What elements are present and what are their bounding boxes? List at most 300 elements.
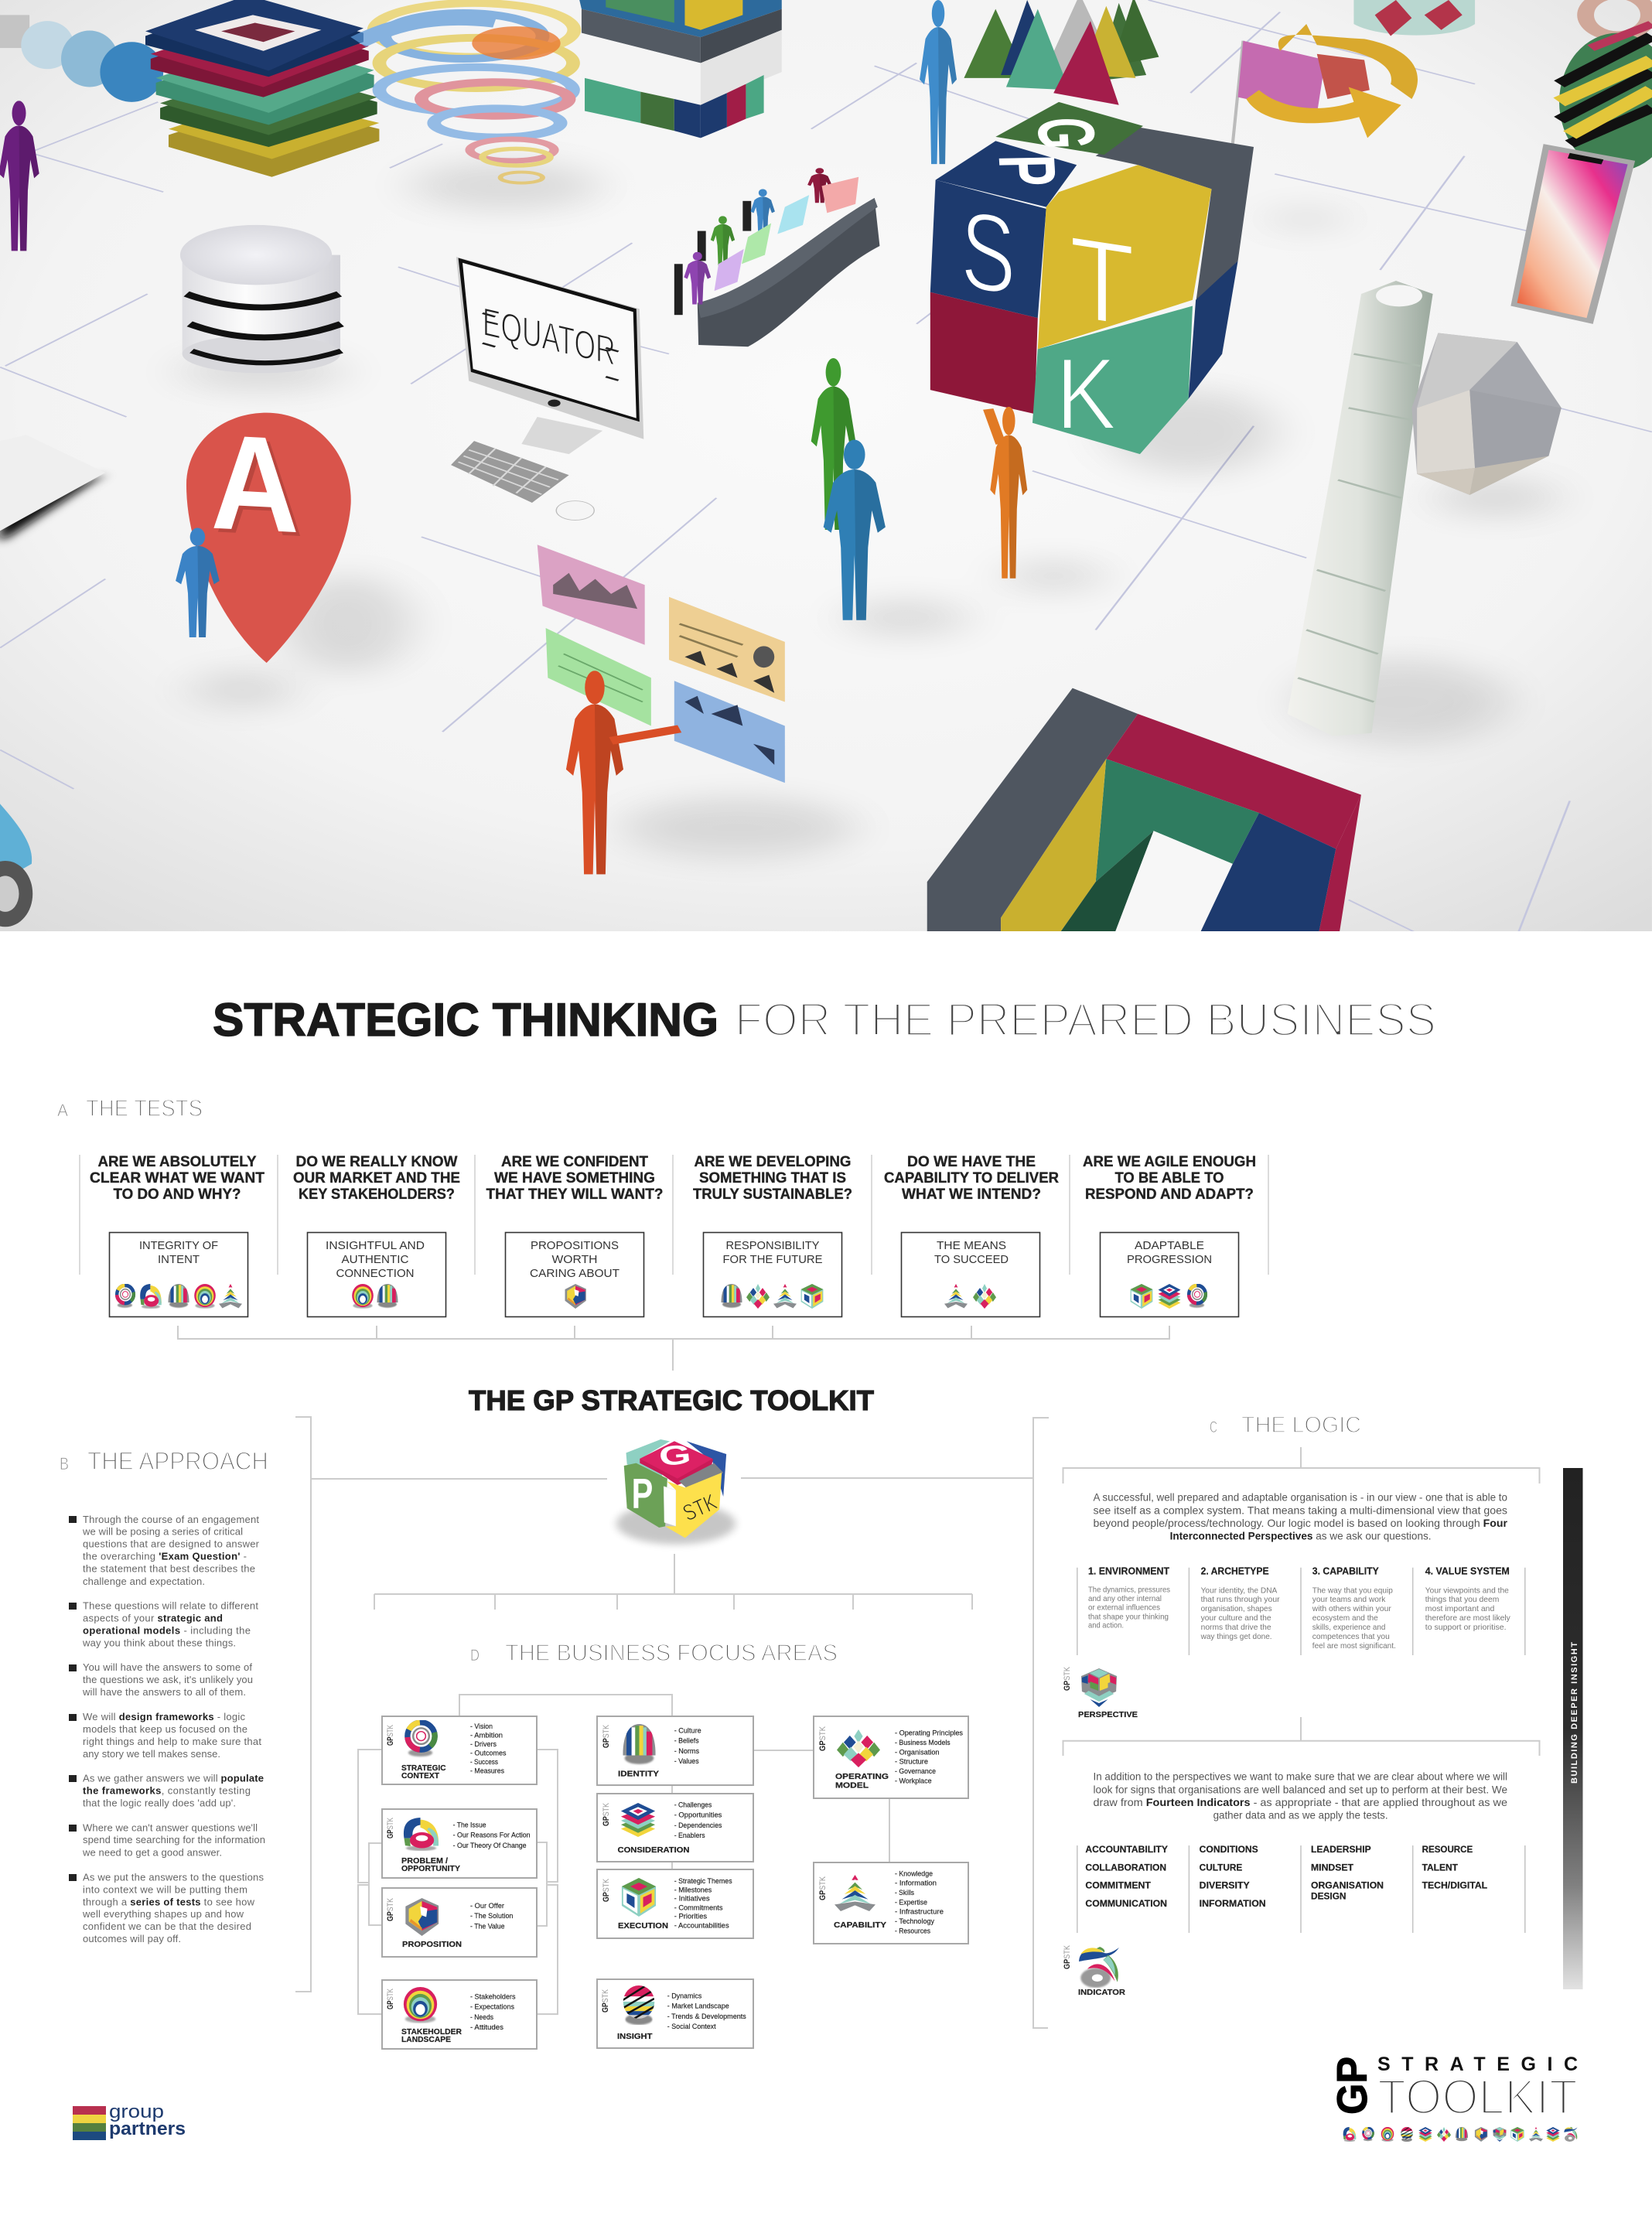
perspective 3: capability: competences that you <box>1312 1632 1390 1641</box>
perspective 2: archetype: way things get done. <box>1200 1632 1272 1641</box>
icon: location pin A: A <box>210 406 299 561</box>
card: capability: - Skills <box>895 1889 914 1897</box>
box: insightful and authentic connection: INSIGHTFUL AND <box>326 1240 425 1252</box>
card: capability <box>814 1862 968 1944</box>
icon: green figure <box>811 358 855 530</box>
icon: flag <box>1233 41 1326 144</box>
icon: patterned dome <box>1353 0 1475 36</box>
test 2 question: OUR MARKET AND THE <box>293 1170 460 1186</box>
card: problem / opportunity <box>382 1809 537 1878</box>
card: capability: GPSTK <box>818 1876 828 1900</box>
perspective 1: environment: that shape your thinking <box>1088 1612 1169 1621</box>
card: execution: - Priorities <box>674 1913 707 1921</box>
heading: business focus areas: D <box>470 1647 480 1664</box>
bullet 1: challenge and expectation. <box>83 1576 205 1587</box>
indicators column 1: COMMITMENT <box>1085 1882 1151 1891</box>
bullet 4: any story we tell makes sense. <box>83 1748 220 1760</box>
card: operating model: OPERATING <box>835 1772 889 1781</box>
perspective 1: environment: and any other internal <box>1088 1594 1162 1603</box>
heading: business focus areas: THE BUSINESS FOCUS AREAS <box>505 1639 838 1666</box>
test 4 question: ARE WE DEVELOPING <box>695 1154 851 1170</box>
perspective badge <box>1063 1666 1138 1719</box>
card: consideration: GPSTK <box>602 1802 611 1826</box>
title: FOR THE PREPARED BUSINESS <box>735 994 1436 1046</box>
logo: group partners: partners <box>109 2118 186 2139</box>
card: insight: GPSTK <box>601 1989 610 2013</box>
title: STRATEGIC THINKING <box>213 994 718 1046</box>
perspective 4: value system: Your viewpoints and the <box>1425 1586 1509 1595</box>
box: the means to succeed <box>902 1233 1039 1316</box>
indicators column 3: DESIGN <box>1311 1893 1346 1902</box>
card: consideration: - Challenges <box>674 1801 712 1810</box>
title <box>213 994 1436 1046</box>
icon: red figure using panels <box>566 671 680 874</box>
heading: the approach: B <box>60 1454 69 1473</box>
hero: 3D toolkit scene <box>0 0 1652 942</box>
card connectors <box>358 1695 889 2014</box>
bullet 1: we will be posing a series of critical <box>82 1526 243 1538</box>
panel: B the approach <box>60 1417 311 1992</box>
text: perspectives intro: Interconnected Perspectives as we ask our questions. <box>1170 1530 1432 1542</box>
card: strategic context: - Success <box>470 1758 498 1767</box>
text: perspectives intro <box>1094 1491 1508 1542</box>
bullet 2: aspects of your strategic and <box>83 1612 223 1624</box>
perspective 1: environment: or external influences <box>1088 1603 1160 1613</box>
logo: GP strategic toolkit <box>1328 2054 1578 2142</box>
logo: group partners: group <box>109 2101 164 2122</box>
indicator badge: INDICATOR <box>1078 1988 1125 1997</box>
perspective 3: capability: with others within your <box>1312 1604 1391 1613</box>
text: indicators intro: gather data and as we apply the tests. <box>1213 1809 1388 1821</box>
floor <box>0 0 1652 936</box>
indicators column 2: CULTURE <box>1200 1863 1243 1873</box>
card: problem / opportunity: GPSTK <box>386 1818 395 1838</box>
indicators column 3: MINDSET <box>1311 1863 1353 1873</box>
bullet 7 <box>82 1872 265 1944</box>
card: execution <box>597 1869 753 1938</box>
perspective 1: environment: The dynamics, pressures <box>1088 1586 1170 1595</box>
indicators column 2: INFORMATION <box>1200 1900 1266 1909</box>
card: insight: - Market Landscape <box>667 2002 729 2011</box>
bullet 5: that the logic really does 'add up'. <box>83 1798 236 1808</box>
test 3 question: ARE WE CONFIDENT <box>501 1154 648 1170</box>
box: propositions worth caring about: WORTH <box>552 1254 597 1266</box>
card: problem / opportunity: - Our Theory Of Change <box>453 1842 527 1850</box>
card: capability: - Information <box>895 1879 937 1888</box>
icon: GP STK cube <box>930 102 1254 454</box>
box: propositions worth caring about: PROPOSITIONS <box>531 1240 619 1252</box>
perspective 4: value system: 4. VALUE SYSTEM <box>1425 1565 1510 1576</box>
test 1 question <box>90 1154 265 1203</box>
indicators column 1: COLLABORATION <box>1085 1863 1166 1873</box>
bullet 1: the statement that best describes the <box>83 1562 255 1574</box>
text: T: T <box>1070 212 1135 352</box>
card: consideration <box>597 1794 753 1862</box>
upper bracket <box>1063 1447 1539 1483</box>
card: operating model: - Operating Principles <box>895 1729 963 1738</box>
box: insightful and authentic connection: CONNECTION <box>336 1268 415 1280</box>
box: adaptable progression <box>1100 1233 1239 1316</box>
box: adaptable progression: PROGRESSION <box>1127 1254 1212 1266</box>
card: execution: - Commitments <box>674 1903 723 1912</box>
soft shadows <box>179 162 1559 858</box>
outer bracket <box>1033 1418 1049 2028</box>
perspective 1: environment <box>1088 1565 1170 1630</box>
connectors around the cube logo <box>311 1478 1033 1610</box>
box: insightful and authentic connection <box>308 1233 445 1316</box>
card: strategic context: - Ambition <box>470 1731 503 1739</box>
logo: GP strategic toolkit: GP <box>1328 2057 1376 2115</box>
card: stakeholder landscape: LANDSCAPE <box>401 2035 451 2044</box>
icon: spiral ribbon <box>358 3 574 183</box>
bullet 2: way you think about these things. <box>82 1637 236 1648</box>
icon: desktop monitor <box>456 257 643 454</box>
bullet 5 <box>83 1773 264 1808</box>
icon: location pin A <box>186 406 351 663</box>
indicators column 4: TALENT <box>1422 1863 1458 1873</box>
icon: GP STK cube: S <box>961 186 1015 319</box>
indicators column 1: ACCOUNTABILITY <box>1085 1845 1168 1855</box>
bullet 5: the frameworks, constantly testing <box>83 1785 251 1797</box>
icon: GP STK cube logo <box>616 1439 736 1545</box>
bullet 6: we need to get a good answer. <box>82 1847 222 1859</box>
logo: group partners <box>73 2101 186 2140</box>
bullet 3: You will have the answers to some of <box>83 1661 252 1673</box>
indicator column dividers <box>1077 1845 1525 1933</box>
card: proposition: - The Value <box>470 1922 504 1931</box>
box: propositions worth caring about: CARING ABOUT <box>530 1268 620 1280</box>
icon: purple figure <box>0 101 39 251</box>
bullet 2 <box>82 1600 258 1648</box>
card: operating model: - Governance <box>895 1767 936 1776</box>
card: stakeholder landscape: - Attitudes <box>470 2023 503 2032</box>
perspective 2: archetype: organisation, shapes <box>1201 1604 1272 1613</box>
bullet 7: As we put the answers to the questions <box>83 1872 265 1883</box>
card: strategic context: - Vision <box>470 1722 493 1731</box>
card: capability: - Resources <box>895 1927 930 1935</box>
box: the means to succeed: TO SUCCEED <box>934 1254 1009 1266</box>
card: insight: - Dynamics <box>667 1992 702 2001</box>
card: identity: IDENTITY <box>618 1770 659 1779</box>
perspective 4: value system: things that you deem <box>1425 1595 1500 1604</box>
card: operating model <box>814 1716 968 1798</box>
bullet 3 <box>82 1661 253 1698</box>
perspective 4: value system <box>1425 1565 1511 1632</box>
perspective 2: archetype: norms that drive the <box>1201 1623 1271 1632</box>
panel: D the business focus areas <box>358 1639 968 2049</box>
logo: GP strategic toolkit: STRATEGIC <box>1377 2054 1578 2075</box>
perspective 1: environment: and action. <box>1088 1621 1124 1630</box>
perspective 3: capability <box>1312 1565 1396 1651</box>
panel: C the logic <box>1033 1412 1582 2028</box>
card: execution: - Initiatives <box>674 1895 710 1903</box>
indicators column 2 <box>1200 1845 1266 1909</box>
bullet 4: We will design frameworks - logic <box>83 1711 246 1722</box>
icon: striped sphere <box>1559 24 1652 171</box>
icon: arch block <box>927 688 1361 942</box>
bullet 1: questions that are designed to answer <box>83 1538 260 1550</box>
card: operating model: - Organisation <box>895 1748 939 1757</box>
text: perspectives intro: beyond people/process/technology. Our logic model is based on looking through Four <box>1094 1517 1508 1529</box>
test 4 question: SOMETHING THAT IS <box>699 1170 846 1186</box>
box: integrity of intent: INTEGRITY OF <box>139 1240 218 1252</box>
box: integrity of intent <box>110 1233 247 1316</box>
icon: layered stack <box>145 0 379 177</box>
icon: orange figure pointing at cube <box>988 407 1027 579</box>
test 4 question: TRULY SUSTAINABLE? <box>693 1186 852 1203</box>
perspective column dividers <box>1077 1568 1525 1655</box>
text: G: G <box>1021 117 1112 149</box>
column dividers <box>80 1155 1268 1275</box>
box: responsibility for the future <box>704 1233 841 1316</box>
card: proposition: PROPOSITION <box>402 1940 462 1949</box>
bullet 4 <box>83 1711 261 1760</box>
floor grid <box>0 0 1652 936</box>
heading: the tests: THE TESTS <box>86 1094 203 1122</box>
perspective 3: capability: The way that you equip <box>1312 1586 1393 1595</box>
card: execution: - Strategic Themes <box>674 1877 732 1886</box>
card: strategic context <box>382 1716 537 1784</box>
perspective 3: capability: ecosystem and the <box>1312 1613 1378 1623</box>
icon: orange core of spiral <box>472 26 561 60</box>
card: operating model: - Workplace <box>895 1777 932 1785</box>
icon: mouse <box>556 501 594 520</box>
card: problem / opportunity: PROBLEM / <box>401 1856 448 1866</box>
logo icon row <box>1343 2127 1578 2142</box>
test 1 question: ARE WE ABSOLUTELY <box>97 1154 257 1170</box>
card: strategic context: - Measures <box>470 1767 504 1775</box>
perspective 4: value system: to support or prioritise. <box>1425 1623 1507 1632</box>
indicators column 1 <box>1085 1845 1168 1909</box>
logo: GP strategic toolkit: TOOLKIT <box>1377 2069 1578 2125</box>
test 5 question: CAPABILITY TO DELIVER <box>884 1170 1059 1186</box>
box: adaptable progression: ADAPTABLE <box>1135 1240 1204 1252</box>
indicators column 4: RESOURCE <box>1422 1845 1473 1855</box>
card: problem / opportunity: OPPORTUNITY <box>401 1864 460 1873</box>
bullet 4: models that keep us focused on the <box>83 1723 247 1735</box>
connector: tests to toolkit <box>178 1326 1169 1371</box>
perspective 4: value system: most important and <box>1425 1604 1494 1613</box>
card: execution: - Accountabilities <box>674 1921 729 1930</box>
icon: data panels <box>538 545 785 783</box>
text: K: K <box>1056 336 1117 451</box>
test 6 question: RESPOND AND ADAPT? <box>1085 1186 1254 1203</box>
test 5 question: WHAT WE INTEND? <box>902 1186 1041 1203</box>
icon: blue figure <box>920 0 957 164</box>
card: identity: - Culture <box>674 1727 701 1736</box>
bullet 7: through a series of tests to see how <box>83 1896 255 1907</box>
text: P: P <box>632 1470 653 1518</box>
text: indicators intro <box>1094 1770 1507 1821</box>
card: stakeholder landscape <box>382 1980 537 2049</box>
side bar: building deeper insight <box>1563 1468 1582 1989</box>
card: insight: - Trends & Developments <box>667 2013 746 2021</box>
icon: small blue figure <box>176 528 220 637</box>
indicators column 2: CONDITIONS <box>1200 1845 1258 1855</box>
card: execution: - Milestones <box>674 1886 712 1894</box>
card: execution: EXECUTION <box>618 1921 668 1931</box>
card: operating model: GPSTK <box>818 1726 828 1751</box>
card: insight: INSIGHT <box>617 2032 653 2041</box>
indicators column 4: TECH/DIGITAL <box>1422 1882 1487 1891</box>
card: identity: - Beliefs <box>674 1737 699 1746</box>
card: stakeholder landscape: GPSTK <box>386 1989 395 2009</box>
icon: smartphone <box>1510 144 1635 324</box>
indicator badge <box>1063 1944 1125 1997</box>
card: stakeholder landscape: STAKEHOLDER <box>401 2027 462 2037</box>
bullet 1: Through the course of an engagement <box>83 1514 259 1525</box>
perspective 2: archetype <box>1200 1565 1280 1641</box>
card: identity <box>597 1716 753 1785</box>
card: identity: GPSTK <box>602 1724 611 1748</box>
bullet 1 <box>82 1514 260 1587</box>
bullet 7: confident we can be that the desired <box>83 1920 251 1932</box>
bullet 6: Where we can't answer questions we'll <box>83 1821 258 1833</box>
text: G: G <box>657 1439 692 1472</box>
card: identity: - Norms <box>674 1747 699 1756</box>
icon: polyhedron <box>1411 333 1562 495</box>
test 5 question <box>884 1154 1059 1203</box>
test 2 question: KEY STAKEHOLDERS? <box>299 1186 455 1203</box>
box: responsibility for the future: FOR THE FUTURE <box>722 1254 823 1266</box>
card: problem / opportunity: - The Issue <box>453 1821 486 1829</box>
test 6 question <box>1083 1154 1256 1203</box>
indicators column 3 <box>1311 1845 1384 1902</box>
card: strategic context: GPSTK <box>386 1725 395 1746</box>
perspective 2: archetype: 2. ARCHETYPE <box>1201 1565 1269 1576</box>
card: execution: GPSTK <box>602 1878 611 1902</box>
text: indicators intro: draw from Fourteen Indicators - as appropriate - that are applied throughout as we <box>1094 1796 1507 1808</box>
card: consideration: - Dependencies <box>674 1821 722 1830</box>
test 2 question: DO WE REALLY KNOW <box>295 1154 458 1170</box>
card: operating model: MODEL <box>835 1780 869 1790</box>
bracket <box>295 1417 311 1992</box>
test 4 question <box>693 1154 852 1203</box>
card: insight <box>597 1979 753 2048</box>
card: strategic context: - Drivers <box>470 1740 497 1749</box>
side bar: building deeper insight: BUILDING DEEPER INSIGHT <box>1570 1642 1579 1784</box>
text: indicators intro: In addition to the perspectives we want to make sure that we are clear about where we will <box>1094 1770 1507 1783</box>
perspective 3: capability: skills, experience and <box>1312 1623 1386 1632</box>
box: responsibility for the future: RESPONSIBILITY <box>725 1240 820 1252</box>
bullet 2: These questions will relate to different <box>83 1600 258 1612</box>
icon: golden arrows ring <box>1246 24 1418 138</box>
bullet 1: the overarching 'Exam Question' - <box>83 1550 247 1562</box>
perspective 3: capability: 3. CAPABILITY <box>1312 1565 1379 1576</box>
hero: 3D toolkit scene: EQUATOR <box>483 299 616 374</box>
perspective 1: environment: 1. ENVIRONMENT <box>1088 1565 1169 1576</box>
icon: database cylinder <box>180 225 341 373</box>
perspective 3: capability: your teams and work <box>1312 1595 1386 1604</box>
card: proposition: - The Solution <box>470 1912 513 1920</box>
card: stakeholder landscape: - Stakeholders <box>470 1993 516 2002</box>
indicators column 4 <box>1422 1845 1487 1891</box>
bullet 5: As we gather answers we will populate <box>83 1773 264 1784</box>
heading: the logic: C <box>1210 1419 1217 1436</box>
card: proposition <box>382 1888 537 1957</box>
card: capability: CAPABILITY <box>834 1920 886 1930</box>
bullet 7: outcomes will pay off. <box>83 1933 181 1944</box>
card: capability: - Infrastructure <box>895 1908 944 1917</box>
indicators column 3: ORGANISATION <box>1311 1882 1384 1891</box>
heading: the logic: THE LOGIC <box>1241 1412 1361 1438</box>
perspective badge: PERSPECTIVE <box>1078 1710 1138 1719</box>
card: proposition: - Our Offer <box>470 1902 504 1910</box>
card: capability: - Technology <box>895 1917 934 1926</box>
indicators column 2: DIVERSITY <box>1200 1882 1250 1891</box>
perspective 2: archetype: your culture and the <box>1201 1613 1271 1623</box>
indicators column 3: LEADERSHIP <box>1311 1845 1371 1855</box>
test 3 question: THAT THEY WILL WANT? <box>486 1186 664 1203</box>
heading: the approach: THE APPROACH <box>87 1447 268 1475</box>
test 1 question: CLEAR WHAT WE WANT <box>90 1170 265 1186</box>
card: problem / opportunity: - Our Reasons For Action <box>453 1832 531 1840</box>
box: integrity of intent: INTENT <box>158 1254 200 1266</box>
test 1 question: TO DO AND WHY? <box>113 1186 241 1203</box>
bullet 6 <box>82 1821 265 1859</box>
card: consideration: - Enablers <box>674 1832 705 1840</box>
bullet markers <box>69 1516 77 1881</box>
lower bracket <box>1063 1717 1539 1756</box>
box: propositions worth caring about <box>506 1233 643 1316</box>
text: P: P <box>981 154 1073 187</box>
card: strategic context: STRATEGIC <box>401 1763 446 1773</box>
icon: curved reception desk <box>674 168 879 347</box>
heading: the tests: A <box>57 1101 68 1120</box>
perspective badge: GPSTK <box>1063 1666 1072 1691</box>
card: capability: - Knowledge <box>895 1869 933 1878</box>
test 3 question: WE HAVE SOMETHING <box>494 1170 655 1186</box>
card: proposition: GPSTK <box>386 1897 395 1921</box>
heading: the GP strategic toolkit: THE GP STRATEGIC TOOLKIT <box>469 1384 874 1416</box>
indicators column 1: COMMUNICATION <box>1085 1900 1167 1909</box>
indicator badge: GPSTK <box>1063 1944 1072 1969</box>
perspective 2: archetype: that runs through your <box>1201 1595 1280 1604</box>
card: operating model: - Structure <box>895 1758 928 1767</box>
icon: twisted tower <box>1288 281 1433 736</box>
bullet 4: right things and help to make sure that <box>83 1736 261 1747</box>
icon: car bottom left <box>0 804 32 927</box>
card: consideration: - Opportunities <box>674 1811 722 1820</box>
card: identity: - Values <box>674 1757 699 1766</box>
perspective 2: archetype: Your identity, the DNA <box>1201 1586 1277 1595</box>
card: capability: - Expertise <box>895 1898 927 1907</box>
card: insight: - Social Context <box>667 2023 716 2031</box>
bullet 6: spend time searching for the information <box>83 1834 265 1845</box>
icon: pyramids <box>964 0 1159 105</box>
card: operating model: - Business Models <box>895 1739 951 1747</box>
icon: ring top right <box>1585 0 1649 36</box>
perspective 4: value system: therefore are most likely <box>1425 1613 1511 1623</box>
box: insightful and authentic connection: AUTHENTIC <box>342 1254 408 1266</box>
test 3 question <box>486 1154 664 1203</box>
perspective 3: capability: feel are most significant. <box>1312 1641 1396 1651</box>
icon: location pin A: A <box>215 409 303 565</box>
icon: block tower <box>579 0 782 138</box>
text: perspectives intro: A successful, well prepared and adaptable organisation is - in our view - one that is able to <box>1094 1491 1507 1504</box>
text: indicators intro: look for signs that organisations are well balanced and set up to perform at their best. We <box>1094 1783 1507 1795</box>
test 6 question: ARE WE AGILE ENOUGH <box>1083 1154 1256 1170</box>
card: consideration: CONSIDERATION <box>617 1845 690 1855</box>
text: perspectives intro: see itself as a complex system. That means taking a multi-dimensional view that goes <box>1094 1504 1507 1516</box>
card: stakeholder landscape: - Expectations <box>470 2003 514 2012</box>
bullet 2: operational models - including the <box>83 1624 251 1636</box>
panel: A the tests <box>57 1094 1268 1371</box>
card: strategic context: - Outcomes <box>470 1749 507 1757</box>
bullet 3: will have the answers to all of them. <box>82 1686 246 1698</box>
bullet 3: the questions we ask, it's unlikely you <box>83 1674 253 1685</box>
test 5 question: DO WE HAVE THE <box>907 1154 1036 1170</box>
